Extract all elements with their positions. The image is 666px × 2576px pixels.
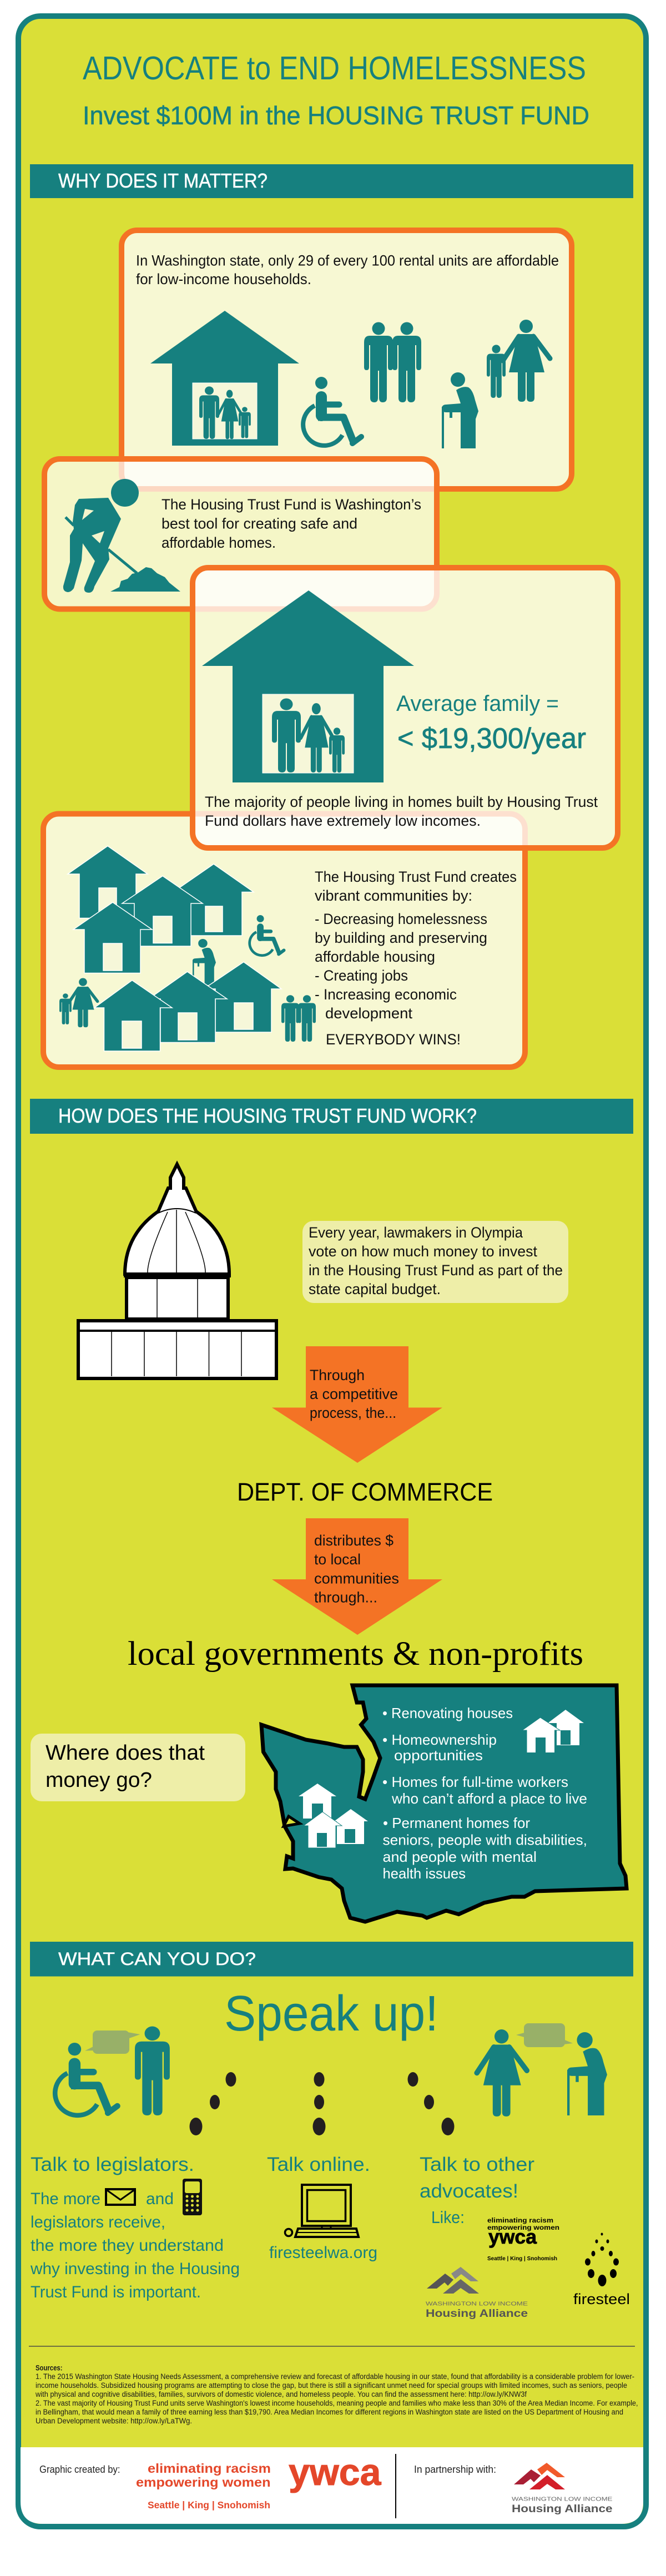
icon: envelope — [106, 2189, 135, 2205]
column: talk to other advocates: Talk to other — [420, 2154, 534, 2175]
sources: income households. Subsidized housing programs are attempting to close the gap, but there is still a significant unmet need for special groups with limited incomes, such as seniors, people — [36, 2381, 627, 2390]
callout: where does that money go: Where does that — [46, 1741, 205, 1765]
arrow: competitive process — [272, 1346, 442, 1463]
logo: housing alliance grey: WASHINGTON LOW INCOME — [426, 2301, 528, 2307]
logo: ywca small — [487, 2218, 559, 2262]
icon: house with family — [150, 311, 299, 446]
text: uses of the money: • Renovating houses — [382, 1705, 513, 1721]
logo: ywca small: Seattle | King | Snohomish — [487, 2256, 557, 2262]
text: best tool: affordable homes. — [162, 534, 276, 551]
text: best tool — [162, 496, 421, 551]
sources: in Bellingham, that would mean a family of three earning less than $19,790. Area Median Incomes for different regions in Washington state are listed on the US Department of Housing and — [36, 2408, 623, 2416]
text: vibrant communities list: EVERYBODY WINS! — [326, 1031, 461, 1048]
text: the more mail and calls: and — [146, 2190, 174, 2208]
logo: ywca red: ywca — [289, 2451, 382, 2493]
text: majority low incomes — [205, 794, 598, 829]
text: vibrant communities list: The Housing Trust Fund creates — [315, 868, 517, 885]
column: talk to legislators — [30, 2154, 240, 2301]
text: vibrant communities list: - Increasing economic — [315, 986, 457, 1003]
arrow: distributes funds: distributes $ — [314, 1532, 393, 1549]
column: talk online — [267, 2154, 377, 2262]
text: the more mail and calls: legislators receive, — [31, 2213, 165, 2231]
arrow: distributes funds: through... — [314, 1589, 377, 1606]
text: the more mail and calls — [30, 2190, 240, 2301]
icon: wheelchair user — [303, 377, 362, 446]
column: talk to legislators: Talk to legislators. — [31, 2154, 194, 2175]
column: talk to other advocates — [420, 2154, 534, 2227]
icon: computer — [285, 2185, 359, 2237]
text: uses of the money: and people with mental — [383, 1848, 537, 1865]
text: majority low incomes: The majority of people living in homes built by Housing Trust — [205, 794, 598, 810]
panel: rental units — [122, 230, 572, 489]
icon: elder with cane — [442, 372, 478, 448]
text: average family: Average family = — [396, 691, 559, 716]
text: affordability statistic — [136, 252, 559, 287]
logo: ywca red: empowering women — [136, 2475, 271, 2489]
icon: houses, upper right — [522, 1710, 584, 1752]
sources: Sources: — [36, 2364, 62, 2372]
text: majority low incomes: Fund dollars have extremely low incomes. — [205, 812, 481, 829]
icon: worker with shovel — [63, 479, 180, 593]
logo: ywca red — [136, 2451, 382, 2511]
icon: capitol building — [77, 1164, 278, 1378]
logo: ywca small: empowering women — [487, 2225, 559, 2231]
panel: average family income — [193, 568, 618, 848]
logo: housing alliance grey: Housing Alliance — [426, 2308, 528, 2320]
logo: firesteel: firesteel — [573, 2291, 630, 2307]
callout: lawmakers vote — [302, 1221, 568, 1303]
text: uses of the money: opportunities — [394, 1747, 483, 1764]
sources — [35, 2364, 638, 2425]
section heading: why does it matter: WHY DOES IT MATTER? — [58, 169, 268, 192]
text: the more mail and calls: Trust Fund is important. — [31, 2283, 201, 2301]
text: the more mail and calls: why investing in the Housing — [30, 2260, 240, 2278]
icon: large house with family — [202, 590, 414, 782]
text: uses of the money — [382, 1705, 587, 1882]
footer divider — [395, 2454, 396, 2518]
icon: two men — [364, 322, 421, 402]
footer: graphic created by: Graphic created by: — [39, 2464, 120, 2475]
sources: Urban Development website: http://ow.ly/LaTWg. — [36, 2417, 192, 2425]
section heading: what can you do — [30, 1942, 633, 1977]
arrow: distributes funds: communities — [314, 1570, 399, 1587]
text: income figure: < $19,300/year — [397, 723, 586, 755]
logo: housing alliance colour: WASHINGTON LOW INCOME — [512, 2496, 613, 2503]
map: Washington state — [261, 1685, 627, 1922]
callout: lawmakers vote: state capital budget. — [309, 1281, 441, 1297]
column: talk online: Talk online. — [267, 2154, 370, 2175]
section heading: why does it matter — [30, 164, 633, 198]
callout: where does that money go: money go? — [46, 1769, 152, 1792]
sources: 1. The 2015 Washington State Housing Needs Assessment, a comprehensive review and forecast of affordable housing in our state, found that affordability is a considerable problem for lower- — [36, 2372, 634, 2381]
text: uses of the money: • Homeownership — [382, 1731, 497, 1748]
text: uses of the money: • Homes for full-time workers — [382, 1774, 568, 1790]
text: vibrant communities list: vibrant communities by: — [315, 887, 472, 904]
section heading: how does it work: HOW DOES THE HOUSING TRUST FUND WORK? — [58, 1104, 477, 1127]
icon: wheelchair user talking to man — [55, 2027, 170, 2115]
logo: housing alliance colour: Housing Alliance — [512, 2503, 613, 2515]
icon: houses, west side — [299, 1784, 368, 1848]
logo: ywca red: eliminating racism — [148, 2461, 271, 2476]
text: uses of the money: who can’t afford a place to live — [391, 1790, 587, 1807]
text: the more mail and calls: The more — [31, 2190, 100, 2208]
text: uses of the money: • Permanent homes for — [383, 1815, 530, 1831]
text: the more mail and calls: the more they understand — [31, 2236, 224, 2255]
arrow: distributes funds: to local — [314, 1551, 361, 1568]
icon: phone — [183, 2179, 202, 2215]
text: local governments and non-profits: local governments & non-profits — [128, 1635, 583, 1673]
logo: ywca small: eliminating racism — [487, 2218, 553, 2224]
text: website: firesteelwa.org — [269, 2244, 377, 2262]
footer: in partnership with: In partnership with: — [414, 2464, 496, 2475]
footer: in partnership with — [414, 2463, 613, 2515]
sources: 2. The vast majority of Housing Trust Fund units serve Washington's lowest income households, meaning people and families who make less than 30% of the Area Median Income. For example, — [36, 2399, 638, 2407]
callout: where does that money go — [31, 1734, 245, 1801]
section heading: what can you do: WHAT CAN YOU DO? — [58, 1949, 256, 1969]
sources: with physical and cognitive disabilities, families, survivors of domestic violence, and homeless people. You can find the assessment here: http://ow.ly/KNW3f — [35, 2390, 527, 2398]
text: dept of commerce: DEPT. OF COMMERCE — [237, 1478, 493, 1506]
section heading: how does it work — [30, 1099, 633, 1134]
icon: woman and child — [487, 320, 550, 402]
divider — [29, 2346, 635, 2347]
panel: best tool — [44, 459, 437, 609]
callout: lawmakers vote: Every year, lawmakers in Olympia — [309, 1224, 523, 1241]
footer: graphic created by — [39, 2451, 382, 2511]
subtitle: Invest $100M in the HOUSING TRUST FUND — [83, 101, 589, 130]
arrow: distributes funds — [272, 1518, 442, 1635]
text: vibrant communities list: - Creating jobs — [315, 967, 408, 984]
text: uses of the money: seniors, people with disabilities, — [383, 1831, 587, 1848]
text: vibrant communities list: by building and preserving — [315, 930, 487, 946]
text: vibrant communities list: affordable housing — [315, 948, 435, 965]
text: vibrant communities list: - Decreasing homelessness — [315, 911, 487, 927]
text: affordability statistic: for low-income households. — [136, 271, 311, 287]
logo: firesteel — [573, 2233, 630, 2307]
logo: ywca small: ywca — [488, 2225, 537, 2248]
text: vibrant communities list — [315, 868, 517, 1048]
arrow: competitive process: Through — [310, 1367, 365, 1383]
text: affordability statistic: In Washington state, only 29 of every 100 rental units are affordable — [136, 252, 559, 269]
column: talk to other advocates: Like: — [431, 2208, 465, 2227]
heading: speak up: Speak up! — [224, 1986, 438, 2042]
arrow: competitive process: process, the... — [310, 1405, 396, 1421]
logo: housing alliance colour — [512, 2463, 613, 2515]
panel: vibrant communities — [43, 814, 525, 1067]
callout: lawmakers vote: in the Housing Trust Fund as part of the — [309, 1262, 563, 1279]
text: best tool: best tool for creating safe and — [162, 515, 357, 532]
callout: lawmakers vote: vote on how much money to invest — [309, 1243, 538, 1260]
logo: ywca red: Seattle | King | Snohomish — [148, 2499, 270, 2511]
title: ADVOCATE to END HOMELESSNESS — [83, 50, 586, 87]
connector dots — [190, 2072, 454, 2135]
icon: woman talking to elder — [477, 2023, 607, 2117]
logo: housing alliance grey — [426, 2267, 528, 2320]
text: vibrant communities list: development — [325, 1005, 413, 1022]
arrow: competitive process: a competitive — [310, 1386, 398, 1402]
text: uses of the money: health issues — [383, 1865, 466, 1882]
column: talk to other advocates: advocates! — [420, 2180, 518, 2202]
text: best tool: The Housing Trust Fund is Washington’s — [162, 496, 421, 513]
illustration: neighbourhood houses and people — [59, 846, 316, 1051]
